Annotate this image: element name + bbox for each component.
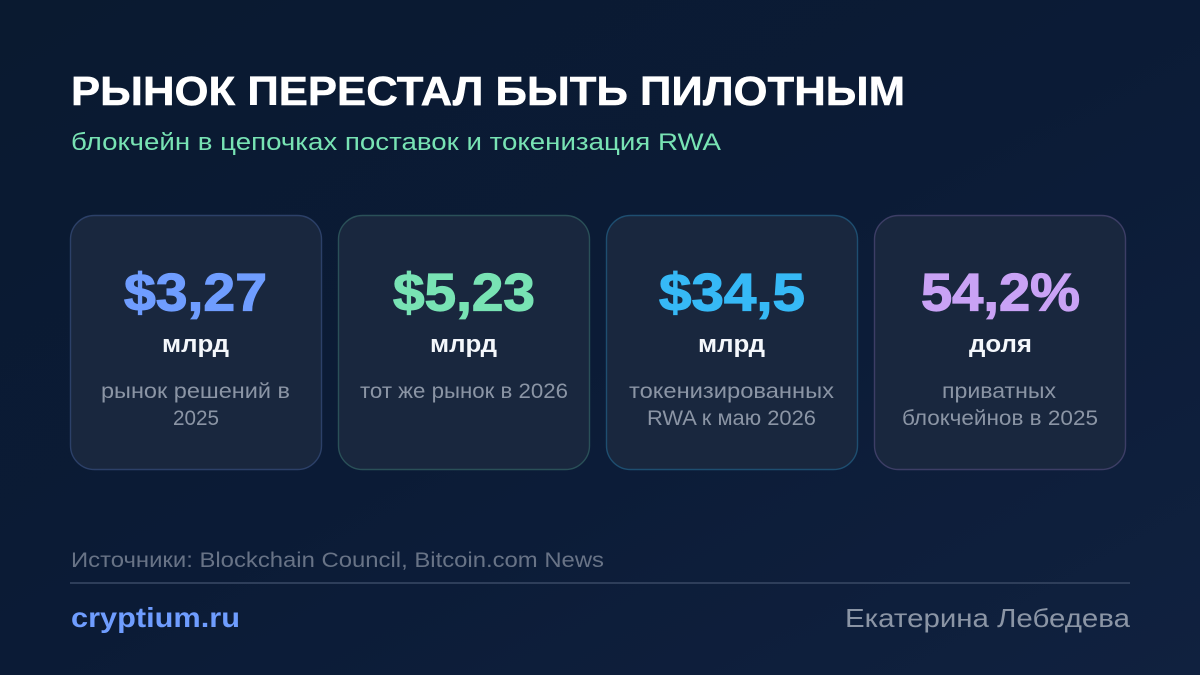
unit: доля: доля	[969, 331, 1032, 358]
panel: card 1, market 2025	[70, 216, 322, 470]
brand: cryptium.ru	[71, 602, 240, 633]
description	[902, 380, 1098, 430]
unit: млрд: млрд	[698, 331, 765, 358]
panel: card 2, market 2026	[338, 216, 590, 470]
description: рынок решений в	[101, 380, 290, 403]
sources: Источники: Blockchain Council, Bitcoin.com News	[71, 549, 604, 572]
description: токенизированных	[629, 380, 835, 403]
description: RWA к маю 2026	[647, 407, 816, 430]
value: $5,23: $5,23	[393, 264, 535, 322]
subtitle: блокчейн в цепочках поставок и токенизация RWA	[71, 129, 721, 156]
value: $3,27: $3,27	[124, 264, 267, 322]
unit: млрд: млрд	[430, 331, 497, 358]
description: тот же рынок в 2026	[360, 380, 568, 403]
value: 54,2%: 54,2%	[921, 264, 1080, 322]
author: Екатерина Лебедева	[845, 603, 1131, 633]
panel: card 4, private blockchains	[874, 216, 1126, 470]
unit: млрд: млрд	[162, 331, 229, 358]
description	[101, 380, 290, 430]
description	[629, 380, 835, 430]
value: $34,5: $34,5	[659, 264, 805, 322]
description: блокчейнов в 2025	[902, 407, 1098, 430]
panel: card 3, tokenized RWA	[606, 216, 858, 470]
description: 2025	[173, 407, 219, 430]
title: РЫНОК ПЕРЕСТАЛ БЫТЬ ПИЛОТНЫМ	[71, 68, 905, 114]
description: приватных	[942, 380, 1057, 403]
